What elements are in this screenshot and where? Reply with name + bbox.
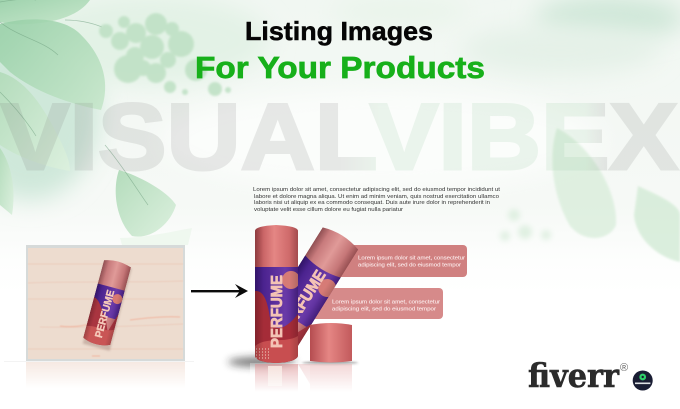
upright perfume bottle <box>255 225 300 363</box>
description text block: labore et dolore magna aliqua. Ut enim ad minim veniam, quis nostrud exercitation ullamco <box>254 194 499 200</box>
wordmark: fiverr <box>528 356 620 395</box>
bottle on wood <box>81 255 133 353</box>
description text block: laboris nisi ut aliquip ex ea commodo consequat. Duis aute irure dolor in reprehenderit in <box>254 200 490 206</box>
tilted perfume bottle <box>298 227 358 346</box>
photo: original product on wood <box>26 245 185 361</box>
title line: Listing Images: Listing Images <box>245 16 433 46</box>
registered mark: ® <box>620 362 628 374</box>
floor shadow <box>228 357 358 367</box>
title <box>195 16 485 85</box>
description text block: voluptate velit esse cillum dolore eu fugiat nulla pariatur <box>254 207 403 213</box>
decorative green leaves <box>0 0 680 262</box>
watermark: VISUALVIBEX: VISUALVIBEX <box>1 84 678 189</box>
description text block: Lorem ipsum dolor sit amet, consectetur adipiscing elit, sed do eiusmod tempor incididunt ut <box>253 187 500 193</box>
callout 1: adipiscing elit, sed do eiusmod tempor <box>358 262 461 268</box>
dotted pattern <box>256 349 270 358</box>
bottle label: PERFUME: PERFUME <box>269 275 286 348</box>
title line: For Your Products: For Your Products <box>195 50 485 85</box>
bottle and cap reflections <box>250 363 358 397</box>
callout 1 <box>330 245 467 277</box>
arrow <box>191 284 248 298</box>
callout 1: Lorem ipsum dolor sit amet, consectetur <box>358 256 465 262</box>
description text block <box>253 187 500 213</box>
callout 2: Lorem ipsum dolor sit amet, consectetur <box>332 300 440 306</box>
callout 2 <box>305 288 443 319</box>
cap <box>310 323 352 362</box>
tilted perfume bottle: PERFUME <box>277 267 330 339</box>
bottle on wood: PERFUME <box>93 289 117 339</box>
fiverr logo <box>528 356 628 395</box>
photo reflection <box>4 361 194 393</box>
decorative faint flower right <box>500 209 551 241</box>
decorative flower cluster <box>99 13 231 96</box>
callout 2: adipiscing elit, sed do eiusmod tempor <box>332 306 436 312</box>
badge icon <box>633 370 653 390</box>
